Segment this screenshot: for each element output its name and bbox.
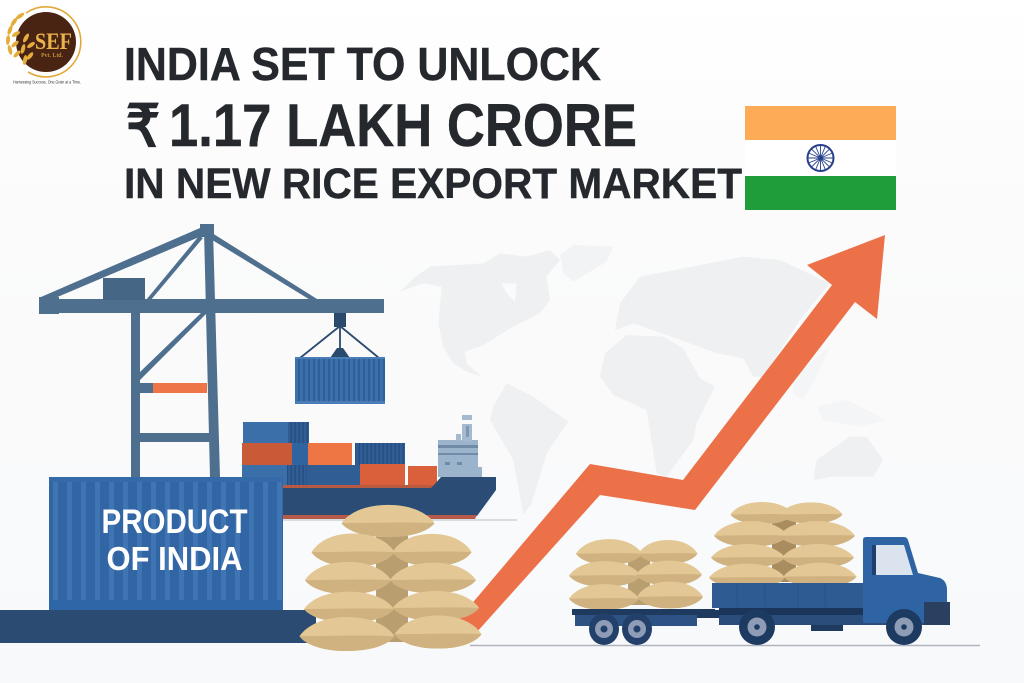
title bbox=[124, 38, 742, 208]
container ship bbox=[242, 415, 517, 520]
sacks: left pile bbox=[300, 505, 482, 651]
crane orange bar bbox=[153, 383, 207, 393]
ground line bbox=[470, 644, 980, 646]
logo: SEF Pvt. Ltd. bbox=[6, 7, 81, 84]
world map background bbox=[400, 245, 887, 515]
icon: Indian flag bbox=[745, 106, 896, 210]
title: 1.17 LAKH CRORE bbox=[169, 92, 637, 159]
crane bbox=[39, 224, 384, 478]
truck bbox=[712, 537, 950, 645]
logo: SEF Pvt. Ltd.: SEF bbox=[35, 29, 72, 54]
title: ₹ bbox=[126, 94, 160, 159]
growth arrow bbox=[458, 235, 885, 633]
product of India container: OF INDIA bbox=[106, 540, 242, 577]
product of India container bbox=[49, 477, 283, 610]
title: IN NEW RICE EXPORT MARKET bbox=[124, 160, 742, 208]
truck trailer bbox=[572, 609, 722, 645]
dock base bbox=[0, 610, 316, 643]
truck window bbox=[872, 545, 913, 575]
truck wheels bbox=[739, 609, 922, 645]
logo: SEF Pvt. Ltd.: Harnessing Success, One Grain at a Time. bbox=[13, 80, 81, 84]
title: INDIA SET TO UNLOCK bbox=[124, 38, 601, 90]
product of India container: PRODUCT bbox=[102, 503, 248, 541]
logo: SEF Pvt. Ltd.: Pvt. Ltd. bbox=[41, 52, 63, 59]
hanging container bbox=[295, 313, 385, 404]
sacks: middle pile on trailer bbox=[569, 539, 703, 610]
sacks: truck pile bbox=[709, 502, 856, 588]
trailer wheels bbox=[589, 613, 652, 645]
crane cab bbox=[103, 278, 145, 300]
